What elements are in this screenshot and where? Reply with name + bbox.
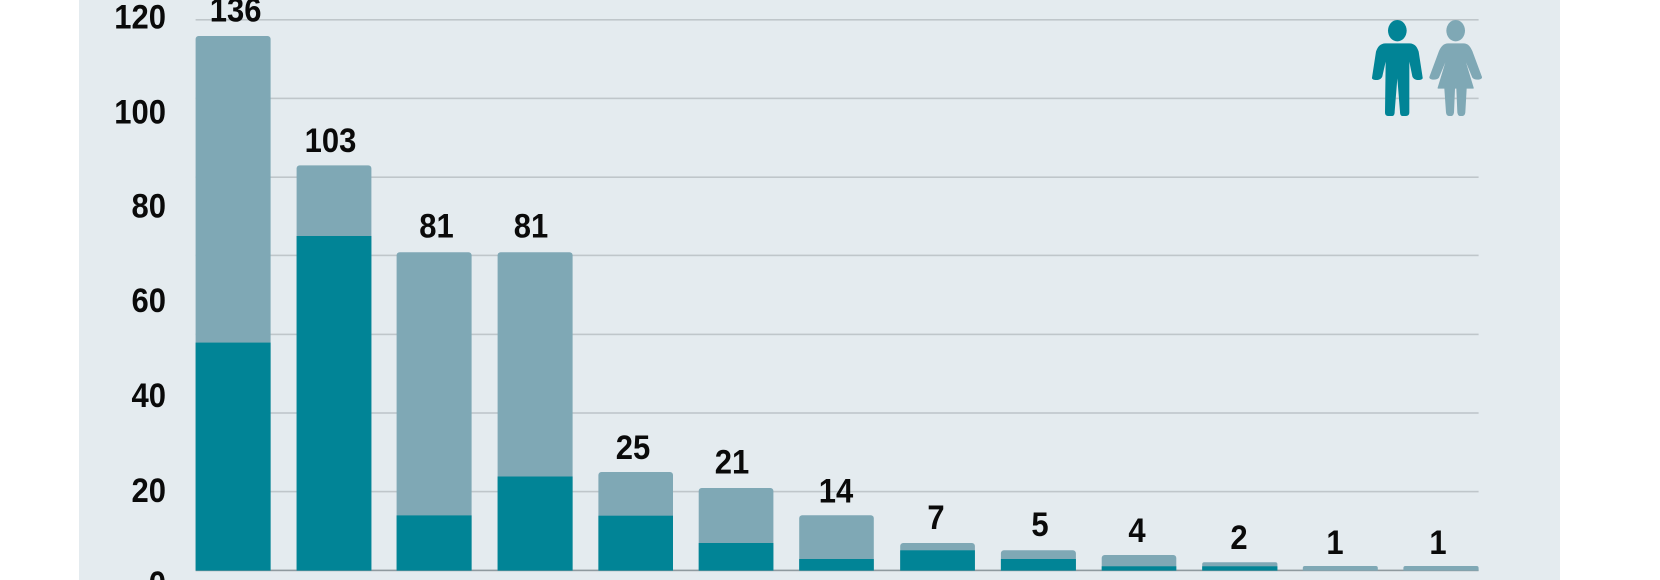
bar value labels: 103	[305, 121, 356, 159]
bar value labels	[210, 0, 1447, 561]
bar value labels: 1	[1429, 524, 1447, 561]
bar value labels: 81	[514, 207, 548, 245]
bars: men (dark)	[196, 236, 1277, 571]
y axis labels	[114, 0, 166, 580]
bar value labels: 7	[927, 498, 945, 536]
bars: women (light)	[196, 36, 1479, 571]
bar value labels: 14	[819, 472, 853, 510]
chart gridlines	[196, 19, 1479, 571]
bar value labels: 1	[1326, 524, 1344, 561]
bar value labels: 2	[1230, 519, 1248, 556]
y axis labels: 40	[132, 377, 166, 414]
y axis labels: 80	[132, 187, 166, 225]
bar value labels: 21	[715, 443, 749, 481]
y axis labels: 60	[132, 282, 166, 320]
bar value labels: 81	[419, 207, 454, 245]
bar value labels: 4	[1128, 511, 1146, 549]
icon: woman	[1429, 20, 1482, 116]
y axis labels: 20	[132, 471, 166, 509]
bar value labels: 25	[616, 428, 650, 466]
bar value labels: 5	[1031, 505, 1049, 543]
y axis labels: 100	[114, 93, 166, 131]
icon: man	[1372, 20, 1423, 116]
